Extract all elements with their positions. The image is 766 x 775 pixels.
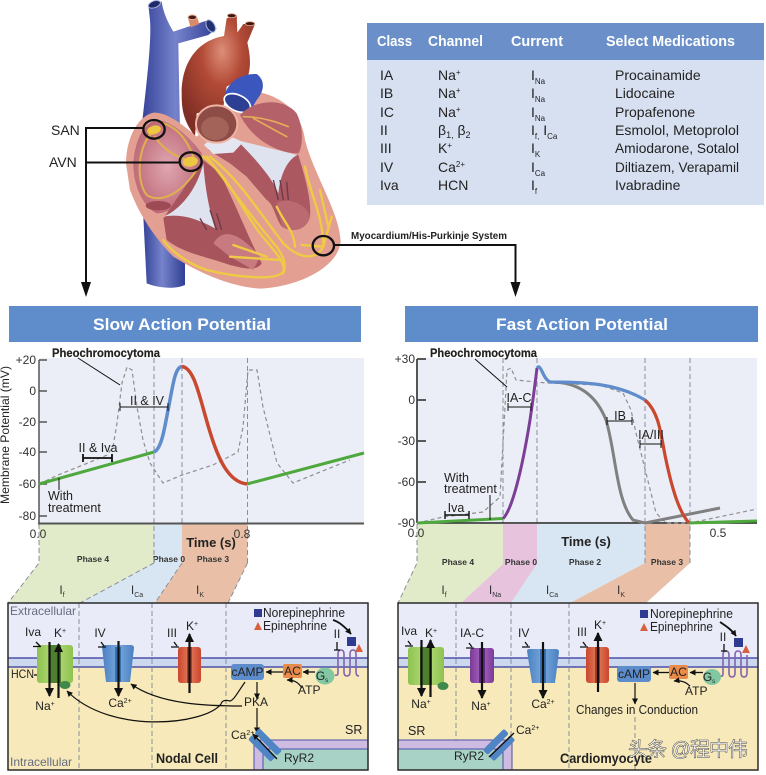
table rows: Amiodarone, Sotalol [615, 140, 739, 156]
channel: III: + [602, 620, 606, 627]
x axis [408, 523, 757, 549]
channel: HCN: HCN [11, 667, 34, 681]
heading: Fast Action Potential: Fast Action Potential [496, 315, 668, 334]
phase bands: fast: I [617, 583, 620, 597]
x axis [30, 524, 364, 550]
pulmonary artery [225, 74, 263, 112]
label: intracellular: Intracellular [10, 755, 72, 769]
panel: cardiomyocyte [398, 603, 758, 770]
superior vena cava and branch [142, 2, 217, 130]
curve: phase 1 and 2 [537, 367, 645, 400]
phase bands: slow: I [196, 583, 199, 597]
table rows: + [456, 86, 461, 95]
channel: HCN: K [425, 626, 433, 640]
phase bands: fast [398, 524, 690, 603]
aorta [182, 15, 255, 137]
y axis: -60 [19, 477, 36, 491]
channel: III: K [594, 618, 602, 632]
annotation: with treatment [444, 471, 497, 520]
label: Nodal Cell: Nodal Cell [156, 751, 218, 766]
table rows: + [456, 68, 461, 77]
y axis: 0 [408, 393, 415, 407]
right ventricle [163, 160, 262, 269]
label: Cardiomyocyte: Cardiomyocyte [560, 751, 652, 766]
channel: IV: Ca [531, 697, 547, 711]
channel: IA-C: IA-C [460, 626, 484, 640]
y axis: -40 [19, 445, 36, 459]
table rows: + [456, 105, 461, 114]
table rows: Iva [380, 177, 399, 193]
table rows: I [531, 67, 535, 83]
legend: catecholamines: Norepinephrine [263, 606, 345, 620]
annotation: Iva [445, 501, 469, 519]
table rows: Ca [547, 132, 558, 141]
legend: catecholamines: Norepinephrine [650, 607, 733, 621]
table rows: K [535, 150, 541, 159]
channel: RyR2: Ca [231, 728, 246, 742]
channel: IA-C: + [487, 701, 491, 708]
channel: HCN: Na [35, 699, 51, 713]
arrow: myocardium to fast action potential [334, 245, 520, 297]
SA node [146, 124, 162, 136]
channel: RyR2 [231, 728, 314, 765]
heart body [126, 92, 341, 289]
phase bands: slow: K [199, 592, 204, 599]
annotation: II and IV: II & IV [130, 394, 165, 408]
signalling: cAMP: cAMP [618, 667, 650, 681]
table rows: Procainamide [615, 67, 701, 83]
phase bands: slow: Ca [134, 592, 143, 599]
arrow: catecholamines to receptor [333, 620, 351, 634]
table rows: Lidocaine [615, 85, 675, 101]
table rows: IA [380, 67, 394, 83]
channel: IV: 2+ [124, 698, 132, 705]
y axis: -30 [398, 434, 415, 448]
channel: HCN: + [427, 699, 431, 706]
annotation: pheochromocytoma: Pheochromocytoma [52, 346, 160, 360]
channel: RyR2: Ca [516, 723, 531, 737]
x axis: 0.0 [408, 526, 425, 540]
x axis: Time (s) [561, 534, 611, 549]
arrow: nodes to slow action potential [81, 128, 180, 297]
channel: IV: IV [94, 626, 106, 640]
curve: phase 3 [182, 366, 247, 484]
phase bands: fast: I [489, 583, 492, 597]
table rows: 1, [446, 130, 454, 140]
channel: RyR2: 2+ [246, 730, 254, 737]
label: ATP: ATP [685, 684, 707, 698]
signalling: AC: AC [284, 664, 301, 678]
table rows: Na [438, 67, 456, 83]
phase bands: fast: I [441, 583, 445, 597]
phase bands: slow: Phase 0 [153, 554, 185, 564]
annotation: IA/III: IA/III [638, 428, 664, 442]
signalling: Gs: s [325, 678, 328, 684]
table rows: β [454, 122, 466, 138]
chart: fast action potential [395, 346, 757, 563]
x axis: 0.8 [234, 527, 251, 541]
signalling: Gs [703, 669, 721, 685]
sarcoplasmic reticulum: SR [345, 723, 362, 737]
sarcoplasmic reticulum [254, 723, 368, 770]
curve: phase 3 [645, 400, 689, 523]
signalling: Gs [316, 668, 334, 684]
table rows: f [535, 187, 538, 196]
annotation: II and Iva: II & Iva [79, 441, 117, 455]
channel: HCN [11, 625, 73, 713]
y axis: +20 [16, 353, 36, 367]
phase bands: fast: Phase 3 [651, 557, 683, 567]
table rows: Ca [438, 159, 456, 175]
phase bands: slow: I [59, 583, 63, 597]
table header: Class [377, 33, 412, 50]
curve: phase 4 [417, 518, 757, 523]
table rows: Na [535, 77, 546, 86]
signalling: AC: AC [670, 665, 687, 679]
table rows: Na [535, 95, 546, 104]
legend: catecholamines [254, 606, 345, 633]
y axis [16, 353, 47, 524]
table rows: HCN [438, 177, 468, 193]
legend: catecholamines: Epinephrine [650, 620, 713, 634]
phase bands: slow: Phase 4 [77, 554, 109, 564]
table rows: IC [380, 104, 394, 120]
channel: III: K [186, 619, 194, 633]
table rows: I [531, 177, 535, 193]
table rows: Na [535, 114, 546, 123]
channel: III [167, 619, 201, 693]
receptor: beta adrenergic [720, 630, 750, 677]
label: Myocardium/His-Purkinje System: Myocardium/His-Purkinje System [351, 231, 507, 242]
annotation: with treatment: With [444, 471, 469, 485]
conduction system [140, 117, 332, 277]
annotation: IA-C: IA-C [506, 391, 532, 405]
watermark: 头条 @程中伟 [628, 738, 748, 761]
phase bands: slow: Phase 3 [197, 554, 229, 564]
channel: RyR2: 2+ [531, 725, 539, 732]
x axis: 0.0 [30, 527, 47, 541]
signalling arrows [67, 672, 315, 733]
heading: Slow Action Potential [9, 306, 361, 342]
channel: HCN: Na [411, 697, 427, 711]
table header: Channel [428, 33, 483, 50]
phase bands: fast: K [620, 592, 625, 599]
x axis: Time (s) [186, 535, 236, 550]
table rows: Esmolol, Metoprolol [615, 122, 739, 138]
table rows: IV [380, 159, 394, 175]
dashed curve: pheochromocytoma [417, 368, 757, 523]
y axis [395, 352, 426, 530]
table rows: Na [438, 85, 456, 101]
table rows: K [438, 140, 447, 156]
table rows: I [539, 122, 547, 138]
annotation: with treatment: With [48, 489, 73, 503]
channel: III: III [167, 626, 177, 640]
channel: III [577, 618, 609, 692]
table rows: III [380, 140, 392, 156]
table header: Current [511, 33, 563, 50]
aortic root [196, 105, 237, 143]
label: PKA: PKA [244, 695, 268, 709]
channel: IV: 2+ [547, 699, 555, 706]
curve: phase 0 [154, 366, 182, 452]
phase bands: slow: I [131, 583, 134, 597]
annotation: with treatment: treatment [48, 501, 101, 515]
annotation: pheochromocytoma [430, 346, 537, 387]
table rows: Ivabradine [615, 177, 681, 193]
label: SAN: SAN [51, 122, 80, 138]
signalling: Gs: G [703, 670, 712, 684]
phase bands: fast: Na [492, 592, 501, 599]
heading: Slow Action Potential: Slow Action Potential [93, 315, 271, 334]
papillary muscles [277, 201, 310, 230]
annotation: with treatment: treatment [444, 482, 497, 496]
table rows: I [531, 122, 535, 138]
channel: IV: Ca [108, 696, 124, 710]
receptor: beta adrenergic: II [334, 627, 340, 641]
signalling: Gs: G [316, 669, 325, 683]
arrow: catecholamines to receptor [720, 622, 736, 636]
table rows: Diltiazem, Verapamil [615, 159, 739, 175]
panel: nodal cell [8, 603, 368, 770]
channel: HCN: Iva [401, 624, 417, 638]
phase bands: fast: f [445, 592, 447, 599]
phase bands: slow [8, 524, 248, 603]
left atrium [240, 102, 302, 153]
curve: grey treatment [551, 382, 720, 523]
His-Purkinje ring [313, 236, 334, 255]
right atrium [133, 120, 202, 213]
table rows: β [438, 122, 446, 138]
left ventricle and septum [208, 143, 310, 230]
table rows: IB [380, 85, 393, 101]
phase bands: slow: f [63, 592, 65, 599]
dashed curve: pheochromocytoma [39, 367, 350, 484]
curve: phase 4 [39, 452, 364, 484]
table rows: II [380, 122, 388, 138]
table rows: f, [535, 132, 539, 141]
table rows: + [447, 141, 452, 150]
table header [377, 33, 735, 50]
annotation: IB [607, 409, 632, 425]
signalling: Gs: s [712, 679, 715, 685]
receptor: beta adrenergic [334, 627, 363, 676]
phase bands: fast: I [546, 583, 549, 597]
channel: IV: IV [518, 626, 529, 640]
label: extracellular: Extracellular [10, 604, 76, 618]
channel: HCN: + [51, 701, 55, 708]
table rows: Na [438, 104, 456, 120]
sarcoplasmic reticulum [398, 724, 512, 770]
label: AVN: AVN [49, 154, 77, 170]
channel: RyR2: RyR2 [284, 751, 314, 765]
annotation: pheochromocytoma [52, 346, 160, 385]
valves [163, 163, 215, 228]
y axis: +30 [395, 352, 415, 366]
table rows: 2 [466, 130, 471, 140]
channel: HCN: Iva [25, 625, 41, 639]
cell background [398, 603, 758, 770]
phase bands: fast: Ca [549, 592, 558, 599]
AVN ring [180, 152, 202, 171]
heading: Fast Action Potential [405, 306, 758, 342]
channel: IA-C [460, 626, 494, 713]
table: drug classes [367, 23, 764, 205]
channel: HCN: + [433, 628, 437, 635]
sarcoplasmic reticulum: SR [408, 724, 425, 738]
table rows: 2+ [456, 160, 465, 169]
table rows: I [531, 140, 535, 156]
cell background [8, 603, 368, 770]
table rows: Ca [535, 169, 546, 178]
channel: IV [518, 626, 559, 711]
label: changes in conduction: Changes in Conduction [576, 703, 698, 717]
label: ATP: ATP [298, 683, 320, 697]
channel: III: III [577, 625, 587, 639]
table rows [380, 67, 739, 196]
table header: Select Medications [606, 33, 735, 50]
channel: RyR2: RyR2 [454, 749, 484, 763]
phase bands: fast: Phase 0 [505, 557, 537, 567]
AV node [182, 155, 199, 168]
y axis: 0 [29, 384, 36, 398]
channel: III: + [194, 621, 198, 628]
channel: HCN [401, 624, 448, 711]
table rows: Propafenone [615, 104, 695, 120]
x axis: 0.5 [710, 526, 727, 540]
annotation: with treatment [48, 478, 101, 515]
inferior vena cava [143, 217, 185, 288]
table rows: I [531, 104, 535, 120]
phase bands: fast: Phase 2 [569, 557, 601, 567]
y axis: -90 [398, 516, 415, 530]
legend: catecholamines: Epinephrine [263, 619, 327, 633]
signalling arrows [635, 672, 703, 704]
channel: RyR2 [454, 723, 539, 763]
annotation: II and Iva [79, 441, 117, 462]
annotation: Iva: Iva [448, 501, 464, 515]
signalling: cAMP: cAMP [231, 665, 264, 679]
chart: slow action potential [0, 346, 364, 563]
channel: IV [94, 626, 134, 710]
y axis: -20 [19, 415, 36, 429]
channel: IA-C: Na [471, 699, 487, 713]
annotation: IB: IB [614, 409, 626, 423]
SAN ring [143, 120, 165, 139]
y axis: -60 [398, 475, 415, 489]
curve: phase 0 [503, 368, 537, 518]
y axis: -80 [19, 509, 36, 523]
channel: HCN: + [62, 628, 66, 635]
annotation: pheochromocytoma: Pheochromocytoma [430, 346, 537, 360]
heart illustration [126, 0, 341, 289]
table rows: I [531, 85, 535, 101]
receptor: beta adrenergic: II [720, 630, 726, 644]
annotation: II and IV [120, 394, 168, 411]
legend: catecholamines [640, 607, 733, 634]
phase bands: fast: Phase 4 [442, 557, 474, 567]
table rows: I [531, 159, 535, 175]
channel: HCN: K [54, 626, 62, 640]
